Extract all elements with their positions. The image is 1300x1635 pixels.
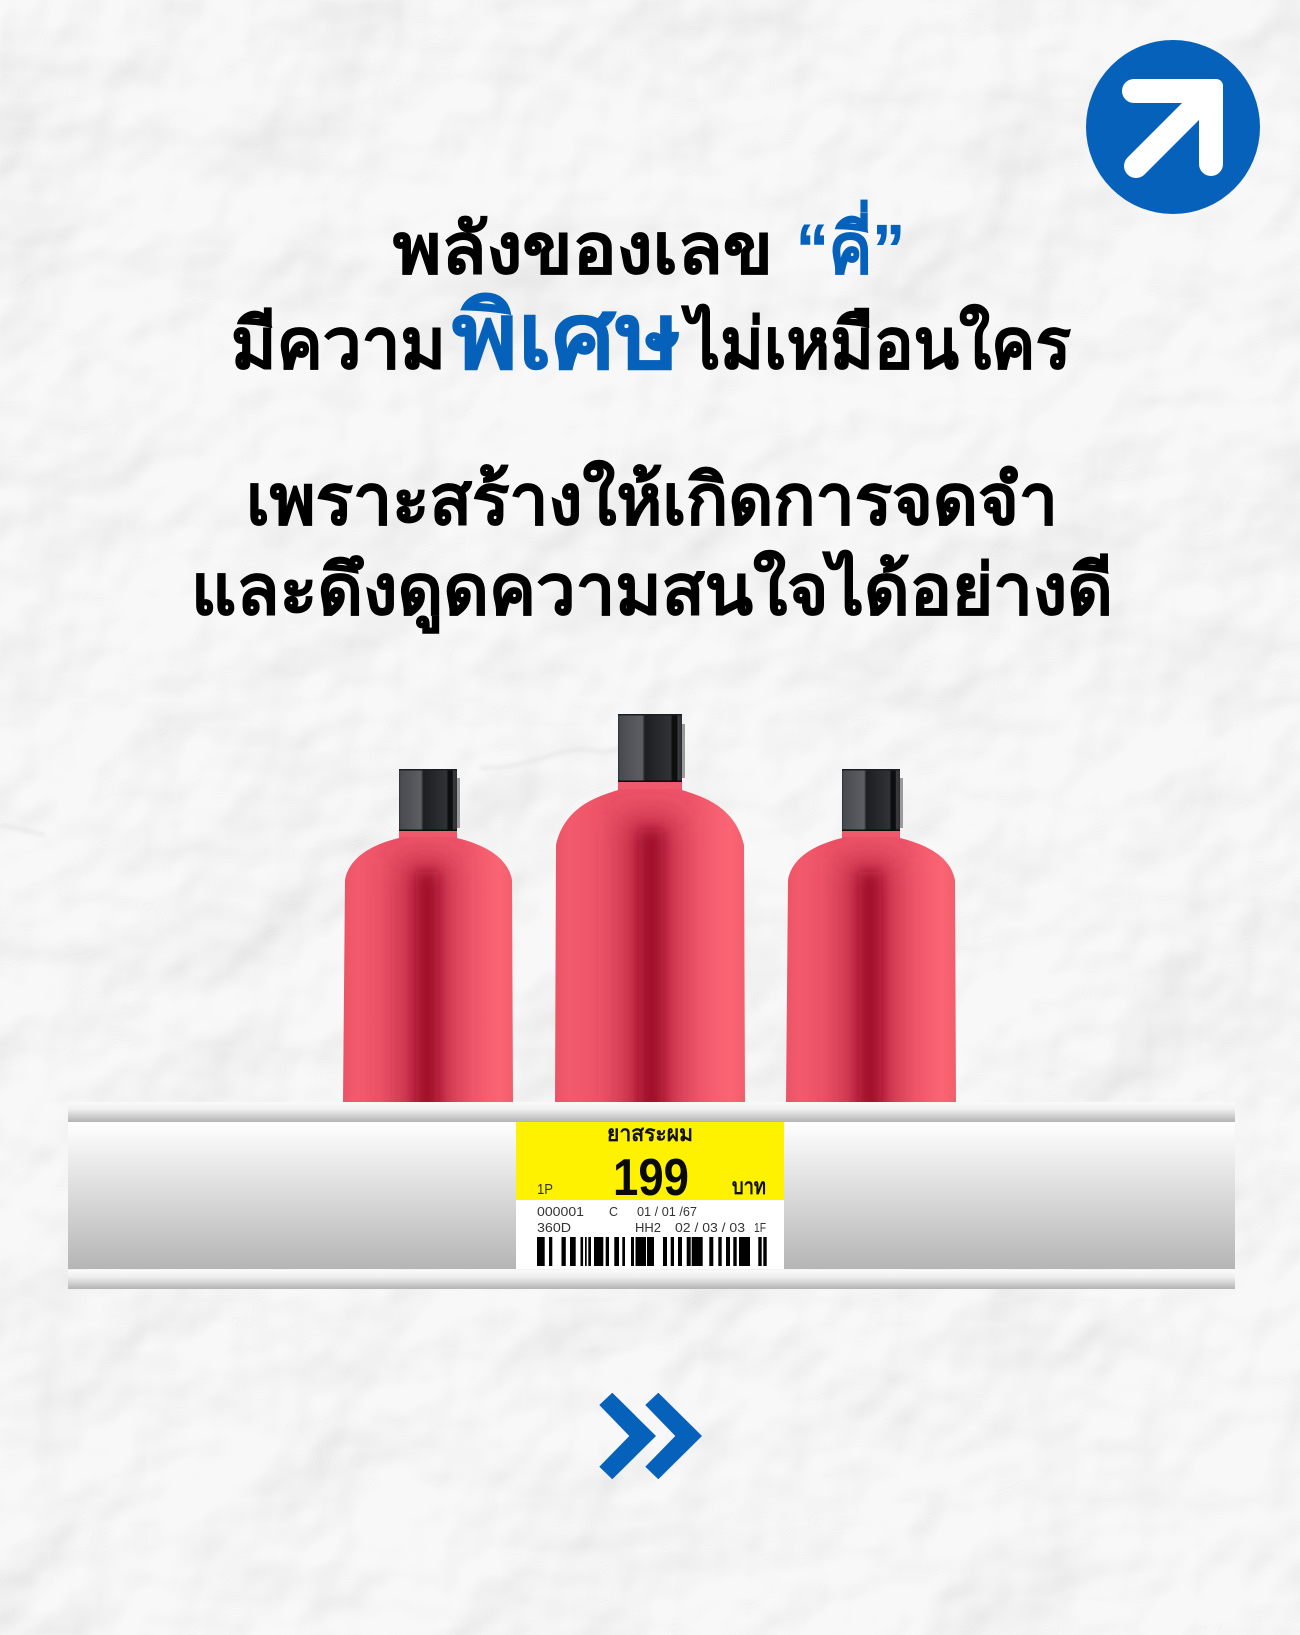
subtitle: second heading block: และดึงดูดความสนใจได้อย่างดี — [191, 549, 1113, 634]
product codes: 360D — [537, 1220, 571, 1235]
price: 199 — [613, 1149, 689, 1207]
product codes: 02 / 03 / 03 — [675, 1220, 745, 1235]
pack size: 1P — [537, 1181, 553, 1198]
icon: next chevrons — [599, 1393, 702, 1479]
title: first heading block: มีความ — [231, 305, 446, 383]
icon: blue circle with up-right arrow — [1086, 40, 1260, 214]
bottle: centre — [555, 714, 745, 1145]
shelf: metal rail — [68, 1102, 1235, 1289]
bottle: left — [343, 769, 513, 1102]
barcode — [537, 1237, 767, 1266]
title: first heading block: “คี่” — [796, 199, 905, 288]
subtitle: second heading block — [191, 459, 1113, 634]
currency: บาท — [732, 1174, 766, 1199]
title: first heading block: พลังของเลข — [393, 210, 773, 288]
product name: ยาสระผม — [607, 1121, 693, 1146]
product codes: 01 / 01 /67 — [637, 1204, 697, 1219]
price tag — [516, 1121, 784, 1269]
product codes: C — [609, 1204, 618, 1219]
title: first heading block: ไม่เหมือนใคร — [680, 303, 1071, 383]
bottles: three red bottles — [343, 714, 956, 1102]
title: first heading block — [231, 199, 1071, 388]
subtitle: second heading block: เพราะสร้างให้เกิดการจดจำ — [246, 459, 1058, 539]
bottle: right — [786, 769, 956, 1102]
product codes: 000001 — [537, 1204, 584, 1219]
product codes: HH2 — [635, 1220, 661, 1235]
title: first heading block: พิเศษ — [452, 286, 681, 388]
product codes — [537, 1204, 766, 1235]
product codes: 1F — [754, 1220, 766, 1235]
